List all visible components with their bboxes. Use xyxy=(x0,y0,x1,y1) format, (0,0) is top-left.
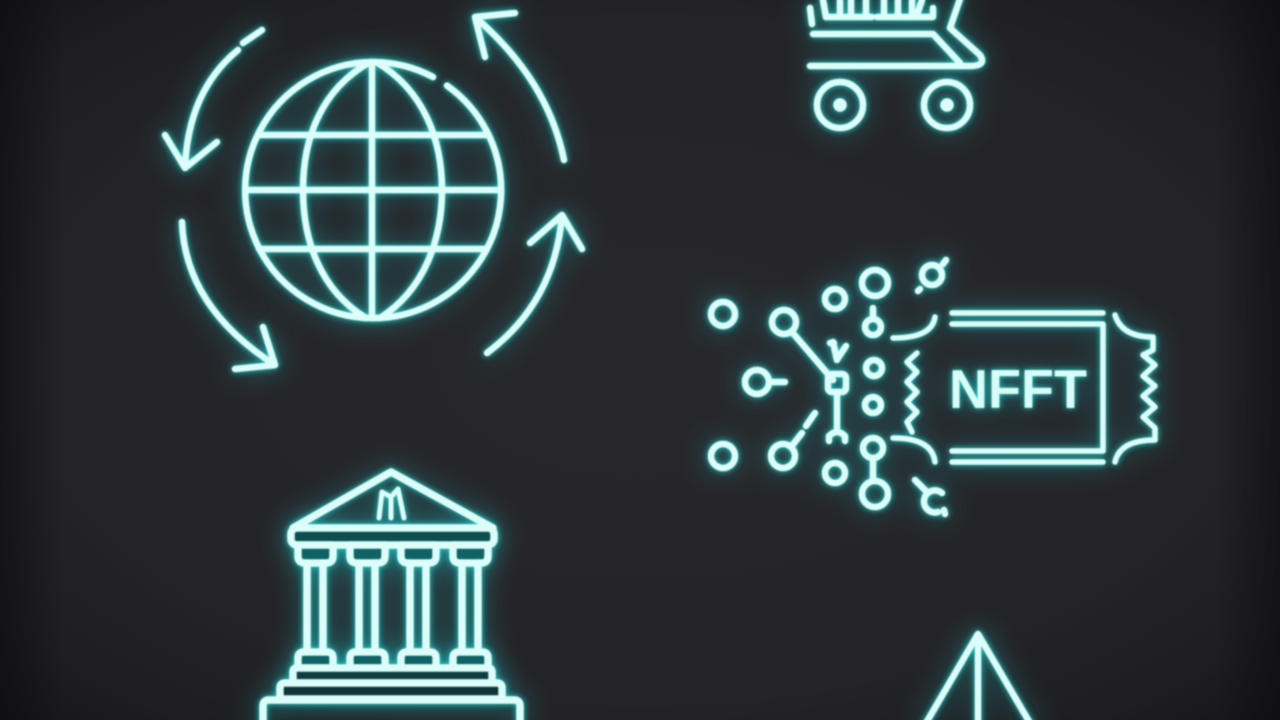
bank column bases xyxy=(298,652,488,668)
bank emblem xyxy=(379,489,404,518)
ticket left wave xyxy=(907,353,917,432)
icon: globe with circular arrows xyxy=(165,13,582,369)
bank capitals xyxy=(298,545,488,563)
cart basket xyxy=(823,0,933,17)
globe xyxy=(245,62,501,318)
cart wheels xyxy=(817,82,970,128)
bank steps xyxy=(263,668,520,720)
ticket right notch xyxy=(1115,315,1155,462)
particles xyxy=(711,260,946,514)
ticket body xyxy=(952,313,1103,462)
icon: paper plane xyxy=(922,634,1034,720)
bank beam xyxy=(291,528,494,545)
NFFT label: NFFT xyxy=(949,358,1087,420)
icon: bank building xyxy=(263,472,520,720)
arrow: bottom left xyxy=(182,222,275,369)
arrow: bottom right xyxy=(487,215,582,353)
icon: shopping cart xyxy=(810,0,982,128)
icon: NFT ticket with dissolving particles xyxy=(711,260,1155,514)
cart frame xyxy=(810,0,982,66)
ticket left brackets xyxy=(893,317,935,462)
arrow: top left xyxy=(165,30,262,168)
arrow: top right xyxy=(475,13,564,160)
bank pediment xyxy=(293,472,493,528)
bank columns xyxy=(307,563,478,652)
